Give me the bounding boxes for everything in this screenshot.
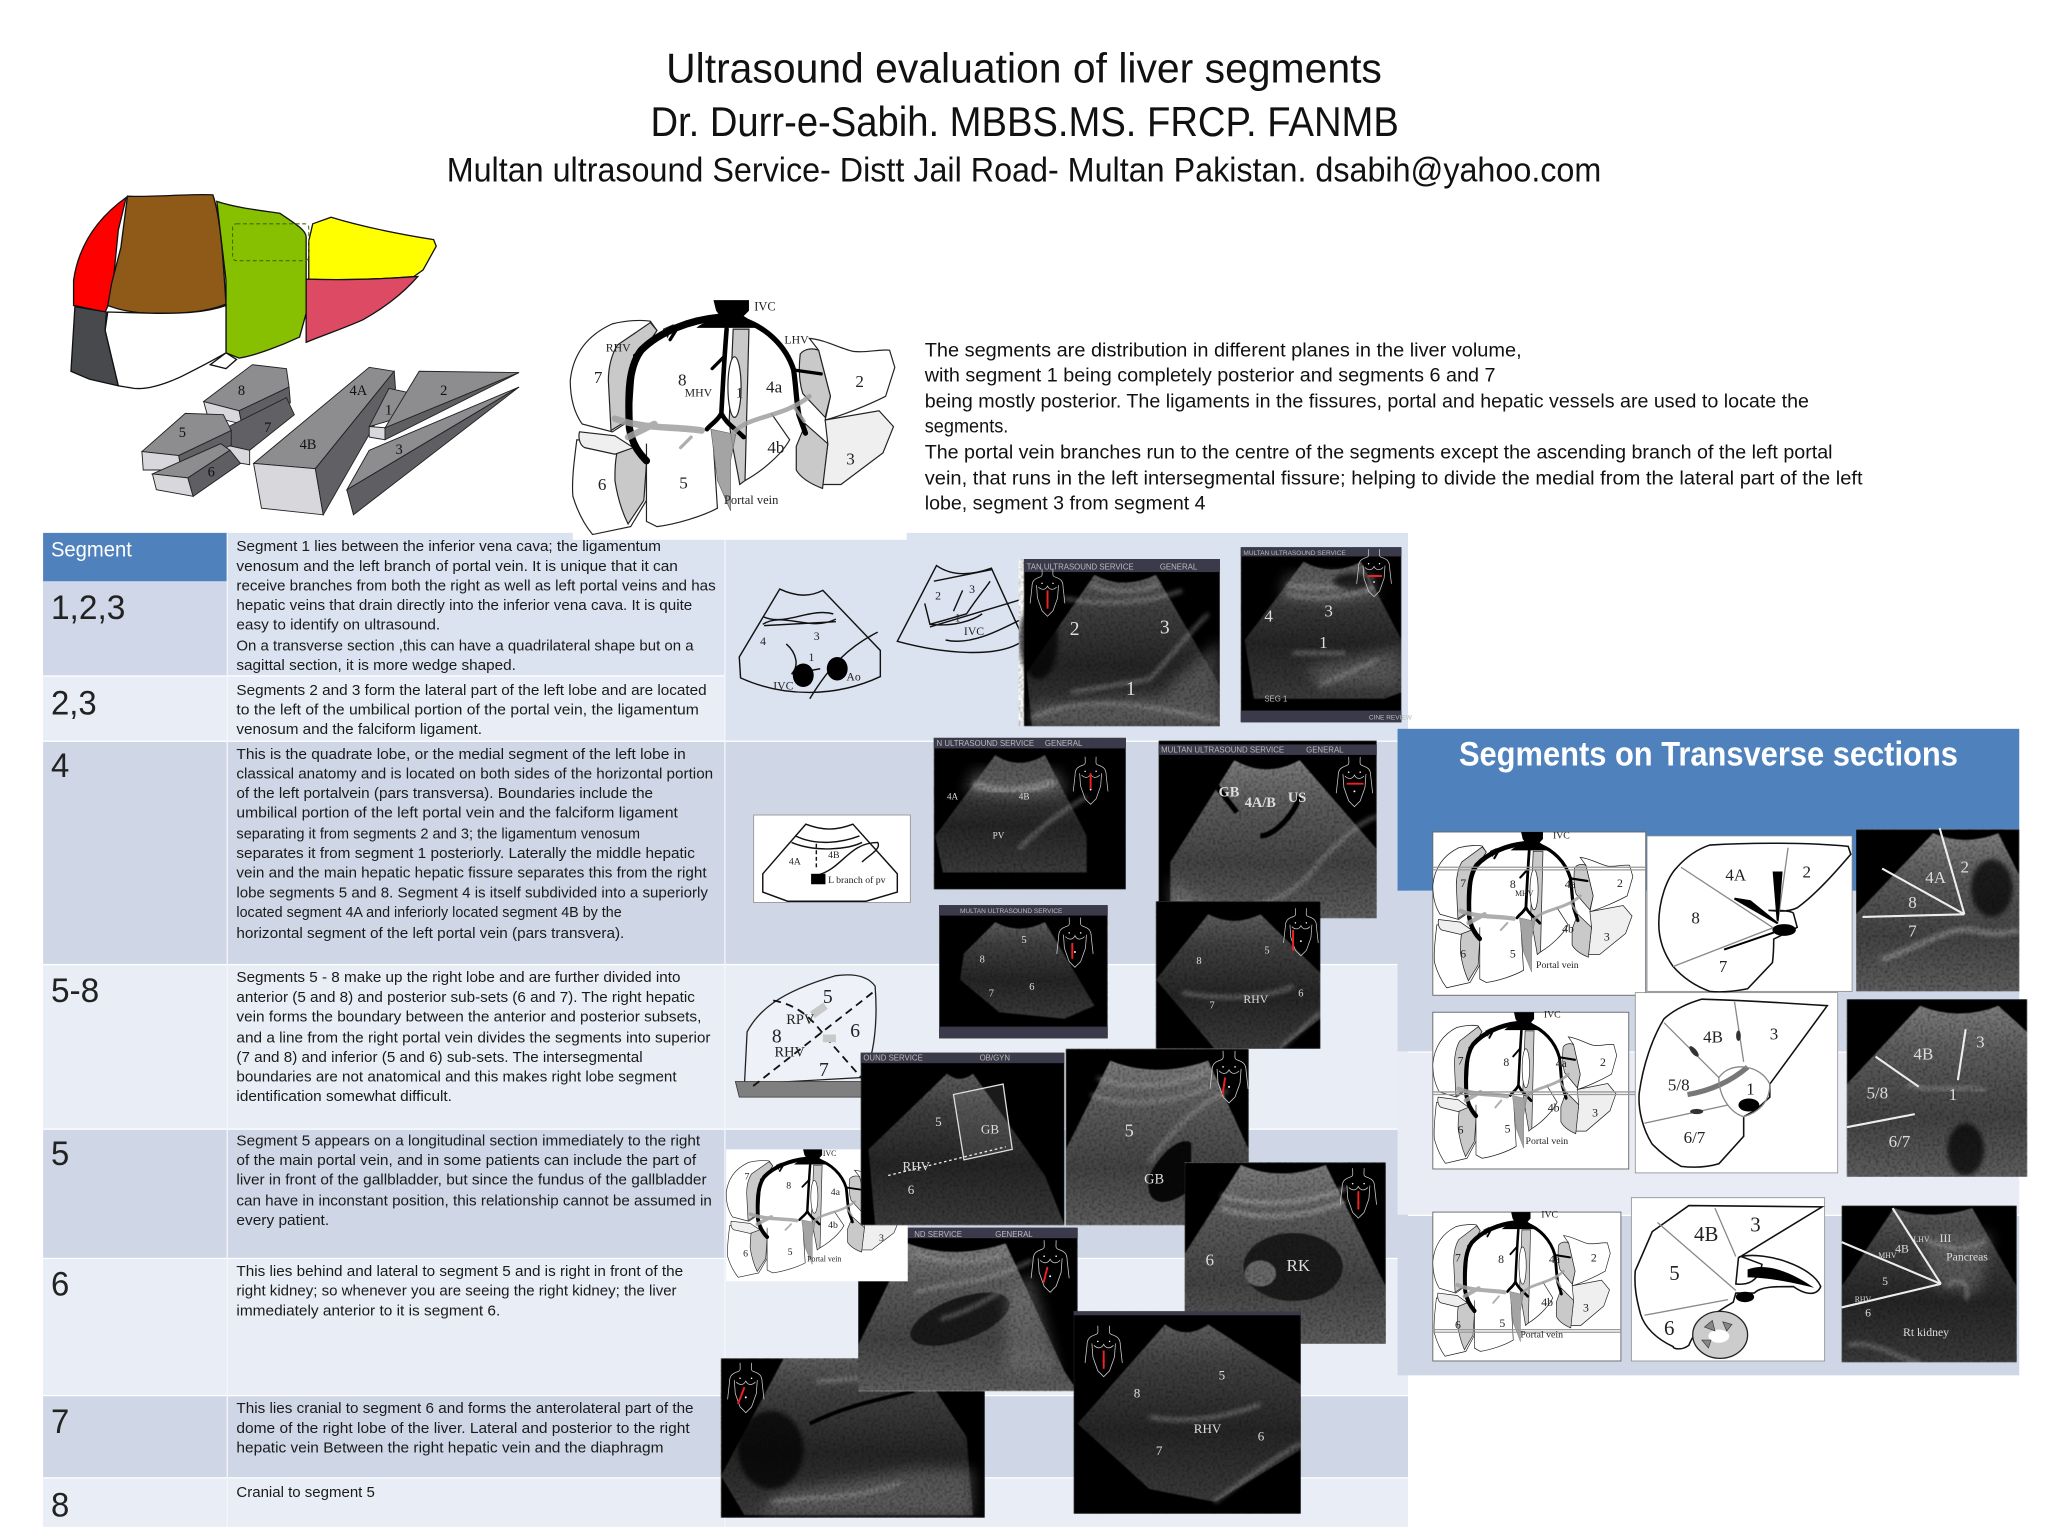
liver section: 4B 3 5 6 with kidney: 6	[1664, 1316, 1674, 1340]
ultrasound: segment 1 3 4: SEG 1	[1264, 694, 1287, 703]
small liver vessel diagram in table: 4a	[831, 1187, 841, 1198]
ultrasound: segment 5 with gallbladder long axis: GB	[1144, 1171, 1164, 1187]
small liver vessel diagram in table: 3	[879, 1233, 884, 1244]
diagram: lower plane: 4a	[1549, 1253, 1561, 1266]
liver section: 4B 3 5/8 6/7 1: 6/7	[1684, 1128, 1705, 1147]
diagram: portal plane: 7	[1458, 1054, 1464, 1067]
3D segment blocks: 4A	[350, 383, 368, 399]
3D segment blocks: 4B	[300, 437, 316, 453]
segment descriptions: to the left of the umbilical portion of the portal vein, the ligamentum	[236, 701, 699, 718]
segment descriptions: This lies behind and lateral to segment 5 and is right in front of the	[236, 1263, 683, 1280]
sketch: segment 4 with left branch of portal vein: 4A	[789, 857, 801, 868]
segment descriptions: Segments 5 - 8 make up the right lobe and are further divided into	[236, 969, 680, 986]
ultrasound: right kidney segment 6 long axis: GENERAL	[995, 1230, 1033, 1239]
ultrasound: 4B 3 5 6 pancreas kidney: LHV	[1913, 1235, 1930, 1244]
diagram: portal plane	[1433, 1009, 1635, 1169]
segment column labels	[51, 538, 132, 1524]
intro paragraph: The segments are distribution in different planes in the liver volume,	[925, 341, 1522, 362]
intro paragraph: with segment 1 being completely posterior and segments 6 and 7	[924, 365, 1496, 386]
ultrasound: right kidney segment 6 long axis	[858, 1228, 1078, 1391]
liver vessel diagram: IVC	[754, 300, 776, 314]
ultrasound: right hepatic vein segments 5 6 7 8	[1156, 901, 1320, 1049]
panel heading: Segments on Transverse sections	[1459, 735, 1958, 773]
sketch: sagittal segments 1,2,3: IVC	[964, 625, 984, 638]
ultrasound: 4A 2 8 7	[1856, 828, 2019, 991]
diagram: upper plane: MHV	[1515, 889, 1534, 898]
diagram: portal plane: 2	[1600, 1056, 1606, 1069]
liver section: 4B 3 5/8 6/7 1	[1635, 993, 1838, 1173]
ultrasound: RHV segments 5 6 7 8: 8	[1134, 1386, 1141, 1401]
ultrasound: segment 1 2 3 sagittal: 1	[1126, 679, 1136, 700]
segment column labels: 5-8	[51, 972, 99, 1010]
table rows	[43, 533, 1408, 1527]
ultrasound: right hepatic vein segments 5 6 7 8: 5	[1264, 945, 1270, 956]
diagram: lower plane: 8	[1498, 1253, 1504, 1266]
segment descriptions: lobe segments 5 and 8. Segment 4 is itself subdivided into a superiorly	[236, 884, 708, 901]
3D segment blocks: 8	[238, 383, 245, 399]
sketch: segments 5 to 8 around right portal vein: 6	[850, 1021, 860, 1042]
title: Dr. Durr-e-Sabih. MBBS.MS. FRCP. FANMB	[650, 98, 1399, 145]
intro paragraph	[924, 341, 1863, 514]
diagram: upper plane: IVC	[1553, 831, 1570, 842]
ultrasound: segment 1 3 4	[1241, 547, 1413, 722]
ultrasound: 4B 3 5 6 pancreas kidney: III	[1940, 1232, 1951, 1245]
liver vessel diagram: 4b	[767, 438, 784, 457]
ultrasound: RHV segments 5 6 7 8: 5	[1219, 1367, 1226, 1382]
diagram: lower plane: 2	[1591, 1252, 1597, 1265]
ultrasound: segment 4A 4B sagittal: N ULTRASOUND SERVICE	[936, 739, 1034, 748]
ultrasound: segments 5 6 7 8 oblique: 8	[980, 955, 985, 966]
ultrasound: segment 1 2 3 sagittal	[1019, 559, 1220, 726]
sketch: transverse segments 1,3,4: 3	[814, 630, 820, 643]
ultrasound: right hepatic vein segments 5 6 7 8: RHV	[1243, 993, 1269, 1006]
segment descriptions: separates it from segment 1 posteriorly. Laterally the middle hepatic	[236, 845, 695, 862]
liver vessel diagram: 3	[846, 450, 855, 469]
diagram: lower plane	[1433, 1209, 1621, 1361]
segment descriptions: vein forms the boundary between the anterior and posterior subsets,	[236, 1008, 701, 1025]
ultrasound: right hepatic vein segments 5 6 7 8: 7	[1209, 1000, 1215, 1011]
liver vessel diagram	[570, 300, 907, 540]
segment column labels: 8	[51, 1486, 69, 1524]
liver section: 4A 2 8 7: 4A	[1725, 865, 1747, 884]
segment descriptions: hepatic veins that drain directly into the inferior vena cava. It is quite	[236, 597, 692, 614]
sketch: segments 5 to 8 around right portal vein: 7	[819, 1060, 829, 1081]
ultrasound: segment 4A/B with gallbladder: MULTAN ULTRASOUND SERVICE	[1161, 745, 1284, 754]
segment descriptions	[236, 538, 716, 1501]
diagram: upper plane: 7	[1460, 877, 1466, 890]
segment descriptions: sagittal section, it is more wedge shaped.	[236, 657, 516, 674]
ultrasound: segment 1 2 3 sagittal: GENERAL	[1160, 562, 1198, 571]
ultrasound: 4B 3 5 6 pancreas kidney: RHV	[1855, 1295, 1872, 1304]
ultrasound: right hepatic vein segments 5 6 7 8: 8	[1196, 956, 1202, 967]
segment column labels: 1,2,3	[51, 589, 125, 627]
small liver vessel diagram in table	[726, 1149, 908, 1281]
segment column labels: Segment	[51, 538, 132, 561]
small liver vessel diagram in table: 5	[788, 1247, 793, 1258]
small liver vessel diagram in table: 8	[786, 1181, 791, 1192]
segment descriptions: immediately anterior to it is segment 6.	[236, 1302, 500, 1319]
ultrasound: 4B 3 5/8 6/7 1	[1847, 999, 2027, 1177]
3D segment blocks: 1	[385, 403, 392, 419]
segment descriptions: classical anatomy and is located on both sides of the horizontal portion	[236, 765, 713, 782]
segment descriptions: anterior (5 and 8) and posterior sub-sets (6 and 7). The right hepatic	[236, 989, 695, 1006]
liver section: 4B 3 5 6 with kidney: 3	[1750, 1213, 1761, 1237]
small liver vessel diagram in table: 7	[744, 1171, 749, 1182]
liver section: 4B 3 5 6 with kidney: 5	[1669, 1261, 1680, 1285]
segment descriptions: Segments 2 and 3 form the lateral part of the left lobe and are located	[236, 682, 707, 699]
ultrasound: segment 5 with gallbladder long axis: 5	[1125, 1120, 1134, 1140]
segment descriptions: On a transverse section ,this can have a quadrilateral shape but on a	[236, 637, 694, 654]
segment descriptions: dome of the right lobe of the liver. Lateral and posterior to the right	[236, 1420, 690, 1437]
sketch: sagittal segments 1,2,3: 3	[969, 583, 975, 596]
ultrasound: 4B 3 5 6 pancreas kidney	[1842, 1206, 2017, 1362]
diagram: portal plane: 8	[1503, 1056, 1509, 1069]
ultrasound: 4B 3 5 6 pancreas kidney: 6	[1865, 1307, 1871, 1320]
diagram: portal plane: 6	[1458, 1124, 1464, 1137]
diagram: portal plane: IVC	[1544, 1009, 1561, 1020]
segment descriptions: (7 and 8) and inferior (5 and 6) sub-sets. The intersegmental	[236, 1049, 643, 1066]
segment descriptions: easy to identify on ultrasound.	[236, 617, 440, 634]
ultrasound: segment 6 with right kidney	[1185, 1162, 1386, 1344]
liver section: 4B 3 5 6 with kidney: 4B	[1694, 1222, 1718, 1246]
sketch: transverse segments 1,3,4	[739, 589, 880, 699]
ultrasound: segment 4A 4B sagittal: PV	[993, 831, 1005, 841]
diagram: upper plane: 4a	[1565, 878, 1577, 891]
sketch: segments 5 to 8 around right portal vein: RHV	[775, 1045, 805, 1061]
segment descriptions: separating it from segments 2 and 3; the ligamentum venosum	[236, 826, 640, 843]
liver section: 4B 3 5/8 6/7 1: 3	[1770, 1025, 1778, 1044]
ultrasound: segment 5 gallbladder oblique	[861, 1053, 1064, 1225]
diagram: upper plane: 6	[1460, 947, 1466, 960]
diagram: upper plane: 5	[1510, 947, 1516, 960]
ultrasound: 4B 3 5/8 6/7 1: 3	[1976, 1033, 1985, 1052]
segment column labels: 6	[51, 1266, 69, 1304]
segment descriptions: receive branches from both the right as well as left portal veins and has	[236, 577, 716, 594]
ultrasound: segment 4A 4B sagittal: 4A	[947, 791, 959, 801]
sketch: segment 4 with left branch of portal vein: L branch of pv	[828, 875, 886, 886]
sketch: transverse segments 1,3,4: IVC	[773, 680, 794, 693]
ultrasound: 4A 2 8 7: 8	[1908, 893, 1917, 912]
segment descriptions: horizontal segment of the left portal vein (pars transvera).	[236, 925, 624, 942]
sketch: segment 4 with left branch of portal vein: 4B	[828, 850, 840, 861]
ultrasound: 4A 2 8 7: 7	[1908, 921, 1917, 940]
ultrasound: segments 5 6 7 8 oblique: 6	[1029, 982, 1034, 993]
ultrasound: segment 6 with right kidney: RK	[1287, 1256, 1311, 1275]
ultrasound: RHV segments 5 6 7 8: 7	[1156, 1443, 1163, 1458]
ultrasound: segment 1 3 4: CINE REVIEW	[1369, 715, 1413, 722]
ultrasound: 4B 3 5/8 6/7 1: 1	[1949, 1085, 1957, 1104]
diagram: lower plane: 3	[1583, 1301, 1589, 1314]
ultrasound: right kidney segment 6 long axis: ND SERVICE	[914, 1230, 962, 1239]
title	[447, 44, 1601, 190]
sketch: segments 5 to 8 around right portal vein: 5	[823, 987, 833, 1008]
3D segment blocks	[142, 365, 519, 515]
segment descriptions: This lies cranial to segment 6 and forms the anterolateral part of the	[236, 1400, 694, 1417]
3D segment blocks: 3	[396, 442, 403, 458]
ultrasound: segment 6 with right kidney: 6	[1206, 1251, 1214, 1270]
liver section: 4A 2 8 7: 7	[1719, 957, 1727, 976]
3D segment blocks: 2	[440, 383, 447, 399]
diagram: lower plane: IVC	[1541, 1209, 1558, 1220]
3D segment blocks: 6	[208, 465, 215, 481]
diagram: portal plane: 5	[1505, 1122, 1511, 1135]
segment descriptions: Segment 1 lies between the inferior vena cava; the ligamentum	[236, 538, 661, 555]
diagram: upper plane: 2	[1617, 877, 1623, 890]
ultrasound: segment 8 kidney view lower left	[721, 1358, 985, 1518]
small liver vessel diagram in table: 6	[743, 1248, 748, 1259]
liver section: 4A 2 8 7: 8	[1691, 908, 1700, 927]
title: Ultrasound evaluation of liver segments	[666, 44, 1382, 91]
ultrasound: segment 4A/B with gallbladder: US	[1288, 790, 1306, 806]
sketch: transverse segments 1,3,4: 1	[808, 651, 814, 664]
diagram: upper plane: Portal vein	[1536, 960, 1579, 971]
liver vessel diagram: Portal vein	[724, 493, 779, 507]
liver vessel diagram: 5	[679, 473, 688, 492]
ultrasound: segment 4A 4B sagittal: GENERAL	[1045, 739, 1083, 748]
segment descriptions: This is the quadrate lobe, or the medial segment of the left lobe in	[236, 746, 686, 763]
segment descriptions: Segment 5 appears on a longitudinal section immediately to the right	[236, 1132, 701, 1149]
segment descriptions: hepatic vein Between the right hepatic vein and the diaphragm	[236, 1439, 664, 1456]
ultrasound: 4A 2 8 7: 4A	[1925, 868, 1947, 887]
diagram: upper plane: 8	[1510, 878, 1516, 891]
liver vessel diagram: 7	[594, 368, 603, 387]
liver vessel diagram: 6	[598, 475, 607, 494]
ultrasound: RHV segments 5 6 7 8	[1074, 1311, 1301, 1514]
ultrasound: segments 5 6 7 8 oblique: 7	[989, 989, 994, 1000]
ultrasound: 4B 3 5/8 6/7 1: 6/7	[1889, 1132, 1910, 1151]
small liver vessel diagram in table: 4b	[828, 1220, 838, 1231]
diagram: lower plane: 6	[1455, 1318, 1461, 1331]
diagram: portal plane: 3	[1592, 1107, 1598, 1120]
liver section: 4A 2 8 7: 2	[1802, 863, 1811, 882]
intro paragraph: The portal vein branches run to the centre of the segments except the ascending branch of the left portal	[925, 442, 1832, 463]
liver section: 4B 3 5/8 6/7 1: 1	[1746, 1080, 1755, 1099]
liver vessel diagram: 8	[678, 371, 687, 390]
diagram: lower plane: 5	[1499, 1317, 1505, 1330]
ultrasound: segment 4A 4B sagittal: 4B	[1019, 791, 1029, 801]
sketch: segments 5 to 8 around right portal vein	[735, 975, 876, 1097]
intro paragraph: being mostly posterior. The ligaments in the fissures, portal and hepatic vessels are used to locate the	[925, 392, 1809, 413]
ultrasound: 4B 3 5 6 pancreas kidney: Rt kidney	[1903, 1326, 1949, 1339]
ultrasound: segment 1 3 4: 1	[1319, 633, 1328, 652]
liver vessel diagram: MHV	[685, 385, 713, 399]
segment descriptions: Cranial to segment 5	[236, 1484, 375, 1501]
diagram: upper plane: 3	[1604, 930, 1610, 943]
segment descriptions: can have in inconstant position, this relationship cannot be assumed in	[236, 1193, 712, 1210]
ultrasound: 4B 3 5 6 pancreas kidney: 5	[1882, 1275, 1888, 1288]
ultrasound: segment 4A/B with gallbladder: 4A/B	[1245, 795, 1276, 811]
sketch: transverse segments 1,3,4: 4	[760, 635, 766, 648]
sketch: transverse segments 1,3,4: Ao	[846, 670, 861, 683]
diagram: lower plane: Portal vein	[1520, 1329, 1563, 1340]
segment column labels: 2,3	[51, 684, 97, 722]
segment descriptions: located segment 4A and inferiorly located segment 4B by the	[236, 904, 622, 921]
ultrasound: RHV segments 5 6 7 8: 6	[1258, 1429, 1265, 1444]
liver section: 4B 3 5/8 6/7 1: 5/8	[1668, 1076, 1690, 1095]
segment descriptions: venosum and the left branch of portal vein. It is unique that it can	[236, 558, 678, 575]
segment column labels: 4	[51, 747, 69, 785]
segment descriptions: identification somewhat difficult.	[236, 1088, 452, 1105]
liver vessel diagram: RHV	[606, 341, 631, 355]
small liver vessel diagram in table: IVC	[823, 1149, 836, 1158]
3D segment blocks: 5	[179, 425, 186, 441]
ultrasound: right hepatic vein segments 5 6 7 8: 6	[1298, 989, 1304, 1000]
ultrasound: segment 4A/B with gallbladder	[1159, 741, 1377, 918]
diagram: portal plane: 4b	[1548, 1102, 1560, 1115]
ultrasound: segment 1 3 4: 4	[1264, 607, 1273, 626]
segment column labels: 7	[51, 1403, 69, 1441]
liver vessel diagram: LHV	[784, 333, 809, 347]
ultrasound: segment 4A/B with gallbladder: GENERAL	[1306, 745, 1344, 754]
segment descriptions: vein and the main hepatic hepatic fissure separates this from the right	[236, 865, 707, 882]
diagram: lower plane: 7	[1455, 1252, 1461, 1265]
intro paragraph: lobe, segment 3 from segment 4	[925, 493, 1206, 514]
ultrasound: 4B 3 5 6 pancreas kidney: Pancreas	[1946, 1250, 1988, 1263]
ultrasound: 4B 3 5/8 6/7 1: 5/8	[1866, 1083, 1888, 1102]
segment descriptions: venosum and the falciform ligament.	[236, 721, 482, 738]
3D segment blocks: 7	[264, 420, 271, 436]
ultrasound: segment 1 3 4: 3	[1324, 601, 1333, 620]
small liver vessel diagram in table: Portal vein	[807, 1255, 841, 1264]
ultrasound: segment 5 gallbladder oblique: 6	[908, 1182, 915, 1197]
ultrasound: segments 5 6 7 8 oblique: 5	[1021, 935, 1027, 946]
segment descriptions: boundaries are not anatomical and this makes right lobe segment	[236, 1068, 677, 1085]
liver vessel diagram: 4a	[766, 377, 783, 396]
liver section: 4B 3 5 6 with kidney	[1631, 1198, 1825, 1361]
segment descriptions: umbilical portion of the left portal vein and the falciform ligament	[236, 805, 679, 822]
ultrasound: segments 5 6 7 8 oblique: MULTAN ULTRASOUND SERVICE	[960, 908, 1063, 915]
liver vessel diagram: 1	[736, 386, 743, 402]
segment descriptions: every patient.	[236, 1212, 329, 1229]
ultrasound: segment 5 gallbladder oblique: OUND SERVICE	[863, 1054, 923, 1063]
sketch: sagittal segments 1,2,3: 2	[935, 590, 941, 603]
sketch: segment 4 with left branch of portal vein	[754, 815, 910, 903]
ultrasound: segment 4A/B with gallbladder: GB	[1219, 785, 1240, 801]
ultrasound: segment 5 with gallbladder long axis	[1066, 1049, 1249, 1225]
liver section: 4A 2 8 7	[1647, 836, 1852, 992]
ultrasound: segment 1 3 4: MULTAN ULTRASOUND SERVICE	[1243, 550, 1346, 557]
ultrasound: 4B 3 5 6 pancreas kidney: MHV	[1878, 1251, 1897, 1260]
liver section: 4B 3 5/8 6/7 1: 4B	[1703, 1027, 1723, 1046]
ultrasound: segment 5 gallbladder oblique: 5	[935, 1114, 942, 1129]
diagram: lower plane: 4b	[1541, 1296, 1553, 1309]
ultrasound: segment 1 2 3 sagittal: TAN ULTRASOUND SERVICE	[1027, 562, 1134, 571]
segment descriptions: and a line from the right portal vein divides the segments into superior	[236, 1029, 711, 1046]
ultrasound: segments 5 6 7 8 oblique	[939, 905, 1108, 1038]
ultrasound: 4B 3 5 6 pancreas kidney: 4B	[1895, 1243, 1909, 1256]
intro paragraph: segments.	[925, 416, 1008, 437]
coloured liver segment map	[71, 195, 436, 389]
diagram: portal plane: 4a	[1556, 1057, 1567, 1070]
segment descriptions: right kidney; so whenever you are seeing the right kidney; the liver	[236, 1283, 677, 1300]
ultrasound: RHV segments 5 6 7 8: RHV	[1194, 1421, 1222, 1436]
sketch: segments 5 to 8 around right portal vein: RPV	[786, 1012, 815, 1028]
segment descriptions: liver in front of the gallbladder, but since the fundus of the gallbladder	[236, 1172, 707, 1189]
sketch: sagittal segments 1,2,3: 1	[955, 612, 961, 625]
diagram: upper plane	[1433, 831, 1646, 995]
ultrasound: segment 1 2 3 sagittal: 3	[1160, 617, 1170, 638]
diagram: upper plane: 4b	[1562, 923, 1574, 936]
ultrasound: 4B 3 5/8 6/7 1: 4B	[1913, 1044, 1933, 1063]
ultrasound: segment 5 gallbladder oblique: OB/GYN	[980, 1054, 1010, 1063]
ultrasound: 4A 2 8 7: 2	[1960, 857, 1969, 876]
sketch: segments 5 to 8 around right portal vein: 8	[772, 1026, 782, 1047]
title: Multan ultrasound Service- Distt Jail Road- Multan Pakistan. dsabih@yahoo.com	[447, 152, 1601, 190]
ultrasound: segment 5 gallbladder oblique: GB	[981, 1122, 999, 1137]
panel bands	[1398, 729, 2019, 1375]
diagram: portal plane: Portal vein	[1526, 1136, 1568, 1147]
sketch: sagittal segments 1,2,3	[897, 566, 1032, 652]
liver vessel diagram: 2	[855, 372, 864, 391]
segment descriptions: of the main portal vein, and in some patients can include the part of	[236, 1152, 697, 1169]
ultrasound: segment 4A 4B sagittal	[934, 738, 1126, 889]
panel: segment table	[43, 533, 1408, 1527]
ultrasound: segment 1 2 3 sagittal: 2	[1070, 619, 1080, 640]
panel: segments on transverse sections	[1398, 729, 2027, 1375]
ultrasound: segment 5 gallbladder oblique: RHV	[903, 1158, 931, 1173]
segment column labels: 5	[51, 1135, 69, 1173]
intro paragraph: vein, that runs in the left intersegmental fissure; helping to divide the medial from the lateral part of the left	[925, 469, 1863, 490]
segment descriptions: of the left portalvein (pars transversa). Boundaries include the	[236, 785, 653, 802]
